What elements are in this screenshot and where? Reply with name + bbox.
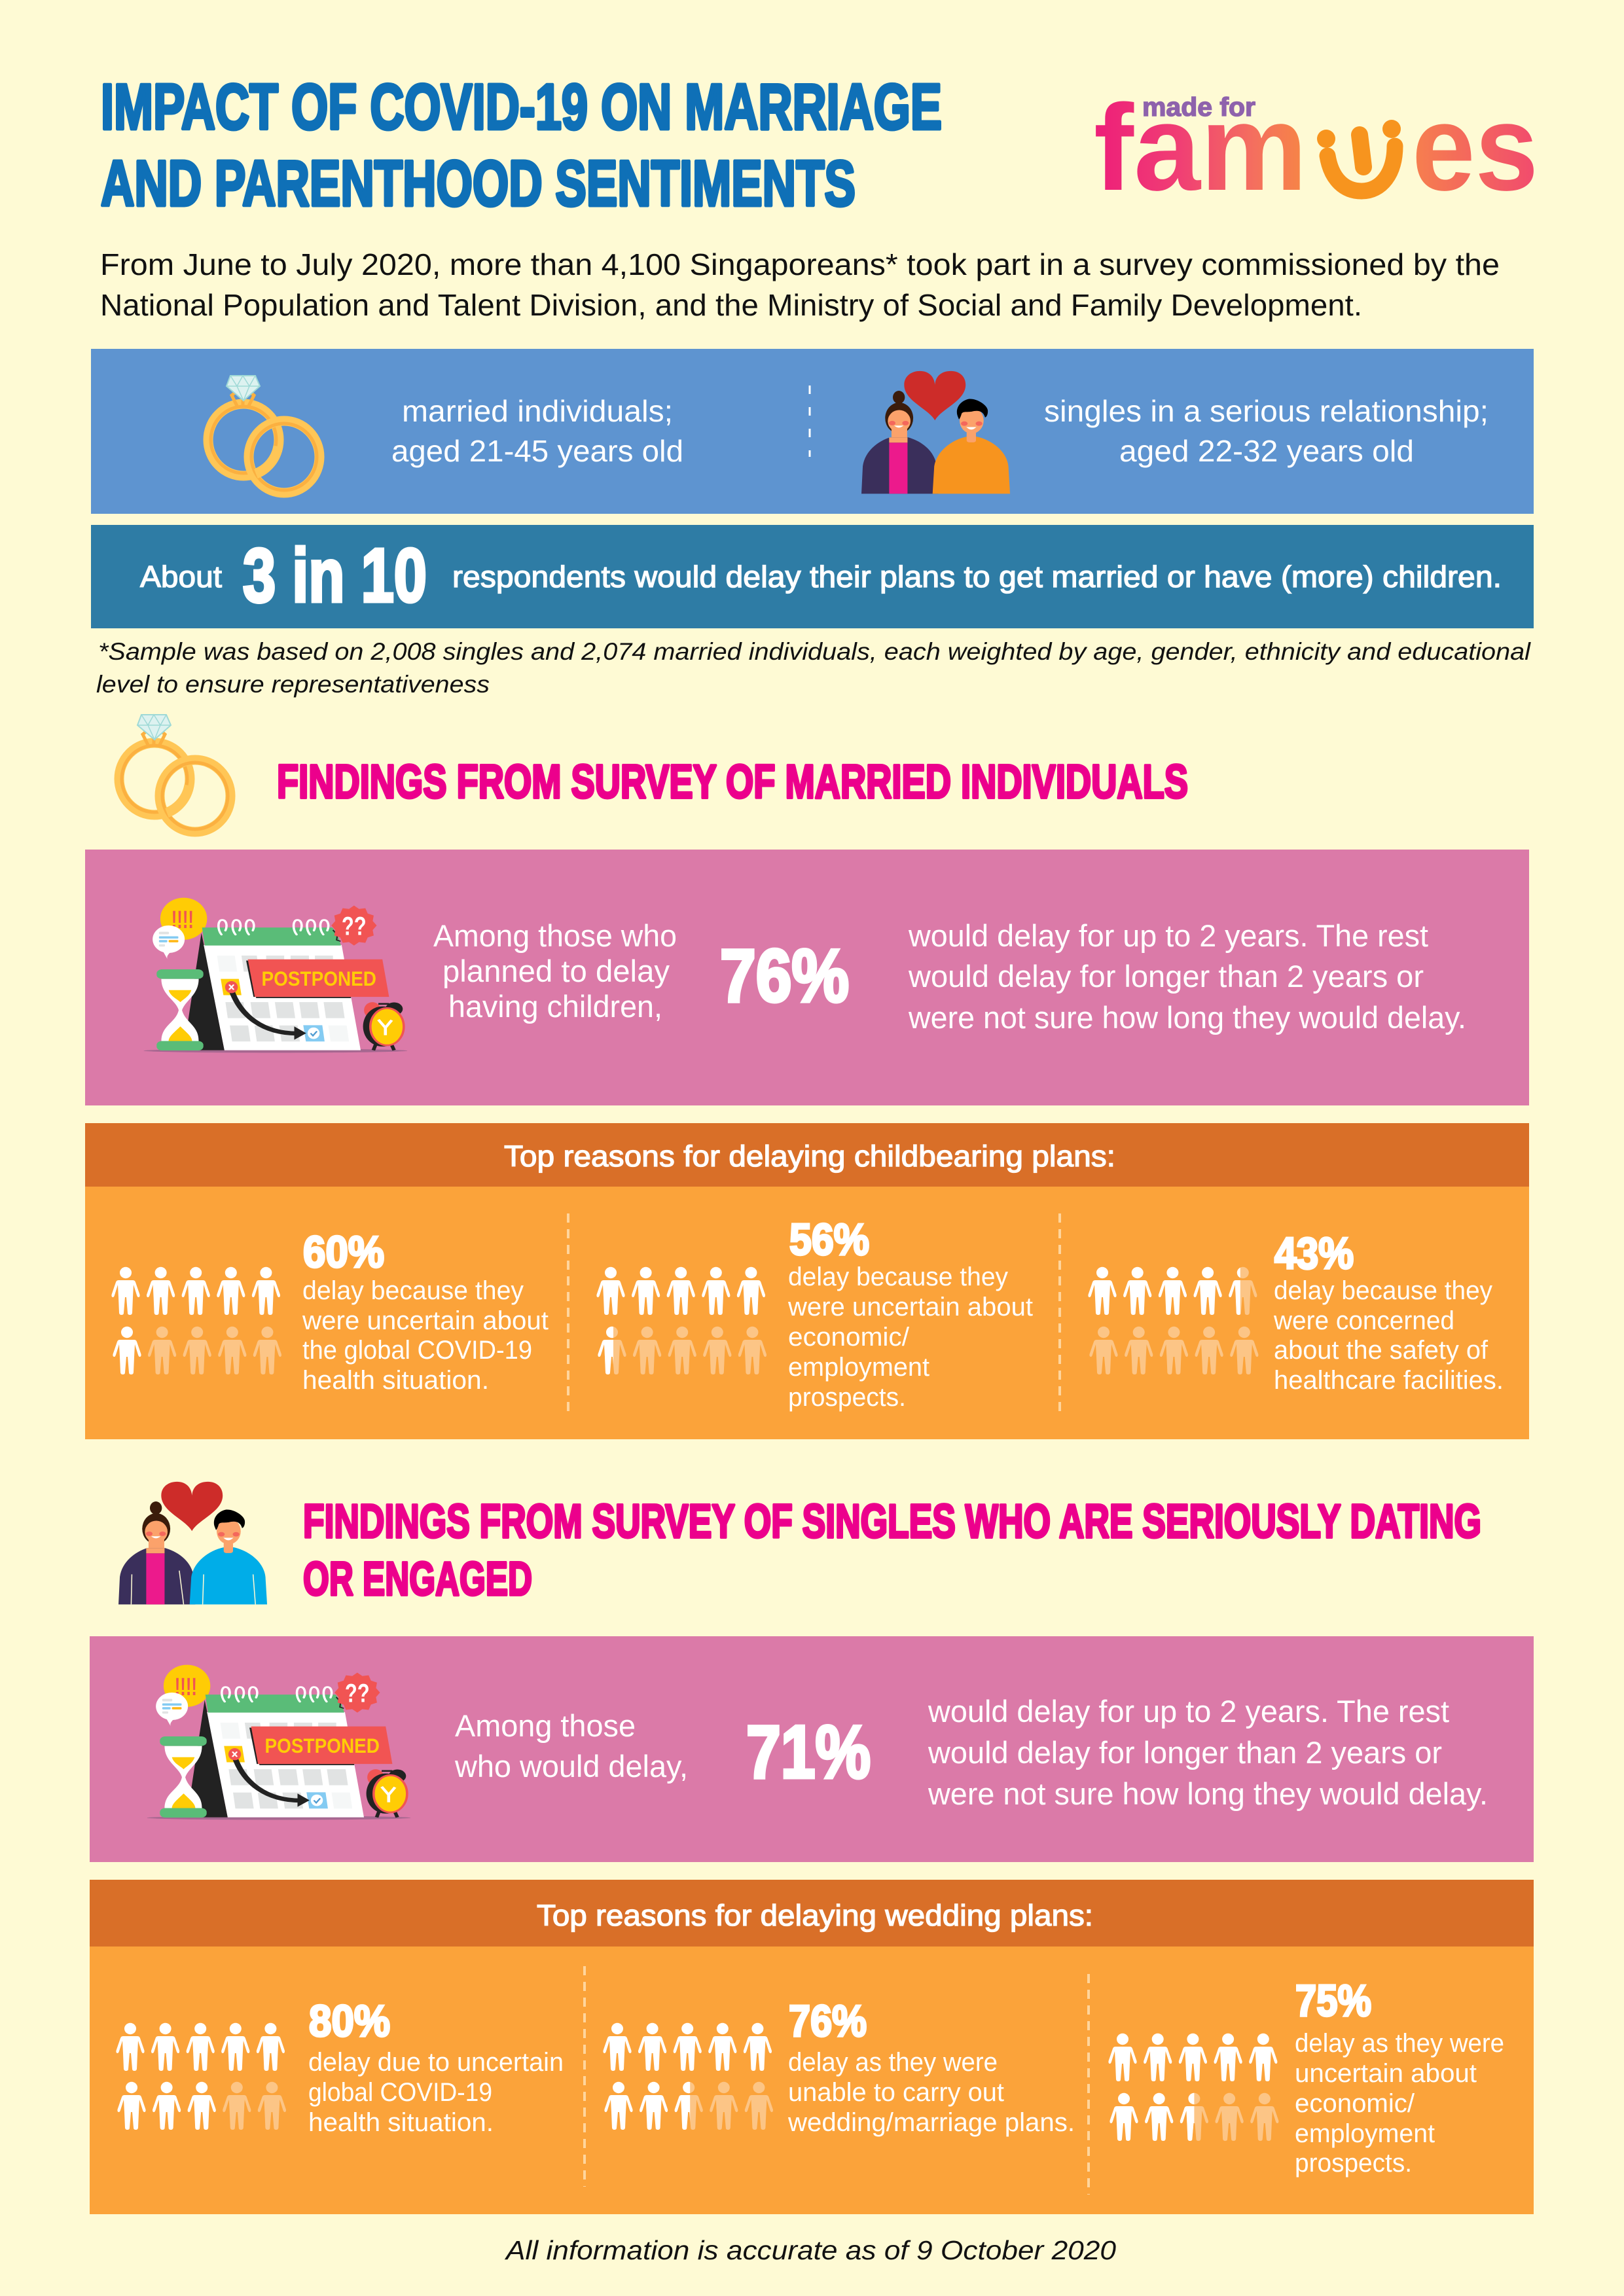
reason: 76%: unable to carry out: [788, 2078, 1004, 2107]
heading: singles: [303, 1496, 1481, 1605]
intro text: From June to July 2020, more than 4,100 Singaporeans* took part in a survey commissioned by the: [100, 247, 1500, 281]
stat: 71%: 71%: [746, 1711, 871, 1794]
text: among those who would delay: [454, 1708, 688, 1784]
reason: 43%: 43%: [1274, 1229, 1354, 1278]
panel: 3 in 10 respondents: respondents would delay their plans to get married or have (more) children.: [452, 560, 1502, 594]
reason: 75%: delay as they were: [1295, 2029, 1504, 2058]
icon: couple in blue: [118, 1482, 267, 1604]
logo: made for families: es: [1412, 79, 1538, 216]
text: singles: [1044, 394, 1489, 468]
heading: wedding reasons: Top reasons for delaying wedding plans:: [537, 1899, 1093, 1932]
text: would delay: [928, 1694, 1488, 1811]
icon: postponed calendar: POSTPONED: [264, 1734, 380, 1757]
reason: 56%: prospects.: [788, 1383, 906, 1412]
reason: 56%: employment: [788, 1353, 929, 1382]
reason: 60%: [111, 1227, 549, 1395]
reason: 76%: delay as they were: [788, 2048, 998, 2077]
reason: 75%: economic/: [1295, 2089, 1415, 2118]
reason: 43%: delay because they: [1274, 1276, 1492, 1305]
heading: married individuals: FINDINGS FROM SURVEY OF MARRIED INDIVIDUALS: [277, 756, 1188, 808]
intro text: [100, 247, 1500, 322]
reason: 75%: 75%: [1295, 1976, 1371, 2026]
panel: 71% would delay: [90, 1636, 1534, 1862]
icon: postponed calendar: [147, 1665, 410, 1820]
reason: 60%: health situation.: [302, 1366, 489, 1395]
heading: singles: OR ENGAGED: [303, 1553, 532, 1605]
icon: postponed calendar: ??: [342, 912, 367, 941]
icon: postponed calendar: !!!!: [175, 1672, 197, 1700]
panel: survey respondents: [91, 349, 1534, 514]
reason: 56%: economic/: [788, 1323, 910, 1352]
intro text: National Population and Talent Division, and the Ministry of Social and Family Development.: [100, 288, 1362, 322]
reason: 56%: [596, 1215, 1033, 1412]
text: married individuals: aged 21-45 years old: [391, 434, 683, 468]
title: IMPACT OF COVID-19 ON MARRIAGE: [101, 71, 942, 143]
panel: 76% delay having children: [85, 850, 1529, 1105]
text: would delay: would delay for up to 2 years. The rest: [928, 1694, 1449, 1729]
text: would delay: would delay for up to 2 years. The rest: [908, 918, 1428, 953]
reason: 60%: delay because they: [302, 1276, 524, 1305]
text: among those who planned: Among those who: [433, 918, 677, 953]
panel: 3 in 10 respondents: 3 in 10: [243, 533, 427, 618]
reason: 56%: delay because they: [788, 1263, 1008, 1291]
text: would delay: were not sure how long they would delay.: [908, 1000, 1466, 1035]
title: AND PARENTHOOD SENTIMENTS: [101, 147, 856, 219]
reason: 75%: employment: [1295, 2119, 1435, 2148]
text: would delay: would delay for longer than 2 years or: [928, 1735, 1442, 1770]
text: would delay: would delay for longer than 2 years or: [908, 959, 1424, 994]
icon: postponed calendar: ??: [345, 1679, 370, 1708]
reason: 80%: global COVID-19: [308, 2078, 492, 2107]
logo: made for families: fam: [1094, 79, 1307, 216]
reason: 80%: [116, 1996, 564, 2137]
logo: made for families: [1094, 79, 1538, 216]
panel: 3 in 10 respondents: [91, 525, 1534, 628]
panel: top reasons for delaying wedding: [90, 1880, 1534, 2214]
reason: 80%: 80%: [309, 1996, 390, 2046]
text: married individuals: married individuals;: [402, 394, 673, 428]
reason: 43%: about the safety of: [1274, 1336, 1489, 1365]
panel: 3 in 10 respondents: About: [140, 560, 222, 594]
heading: childbearing reasons: Top reasons for delaying childbearing plans:: [504, 1139, 1115, 1173]
text: among those who planned: planned to delay: [442, 954, 670, 988]
footnote: level to ensure representativeness: [96, 671, 490, 698]
panel: top reasons for delaying childbearing: [85, 1123, 1529, 1439]
text: among those who would delay: who would delay,: [454, 1749, 688, 1784]
reason: 76%: [603, 1996, 1075, 2137]
footnote: *Sample was based on 2,008 singles and 2,074 married individuals, each weighted by age, gender, ethnicity and educational: [98, 638, 1532, 665]
text: among those who would delay: Among those: [455, 1708, 636, 1743]
reason: 75%: [1108, 1976, 1504, 2178]
icon: wedding rings, married section: [119, 715, 230, 832]
reason: 56%: were uncertain about: [787, 1293, 1033, 1321]
text: would delay: were not sure how long they would delay.: [928, 1776, 1488, 1811]
icon: postponed calendar: POSTPONED: [261, 967, 376, 990]
reason: 60%: the global COVID-19: [302, 1336, 532, 1365]
footnote: [96, 638, 1532, 698]
icon: wedding rings: [208, 376, 319, 493]
reason: 75%: prospects.: [1295, 2149, 1412, 2178]
reason: 80%: health situation.: [308, 2108, 494, 2137]
stat: 76%: 76%: [720, 935, 849, 1018]
reason: 43%: were concerned: [1273, 1306, 1454, 1335]
text: among those who planned: [433, 918, 677, 1024]
reason: 60%: were uncertain about: [302, 1306, 549, 1335]
text: among those who planned: having children,: [448, 989, 662, 1024]
text: would delay: [908, 918, 1466, 1035]
reason: 75%: uncertain about: [1295, 2059, 1477, 2088]
icon: postponed calendar: !!!!: [171, 905, 194, 933]
text: singles: aged 22-32 years old: [1119, 434, 1414, 468]
reason: 76%: wedding/marriage plans.: [787, 2108, 1075, 2137]
title: [101, 71, 942, 219]
reason: 43%: healthcare facilities.: [1274, 1366, 1504, 1395]
logo: made for families: made for: [1142, 93, 1255, 122]
reason: 56%: 56%: [789, 1215, 869, 1265]
reason: 60%: 60%: [303, 1227, 384, 1277]
reason: 80%: delay due to uncertain: [308, 2048, 564, 2077]
icon: couple in orange: [861, 371, 1010, 493]
text: married individuals: [391, 394, 683, 468]
icon: postponed calendar: [143, 898, 407, 1052]
footer note: All information is accurate as of 9 October 2020: [504, 2235, 1116, 2265]
reason: 43%: [1088, 1229, 1504, 1395]
reason: 76%: 76%: [789, 1996, 867, 2046]
text: singles: singles in a serious relationship;: [1044, 394, 1489, 428]
